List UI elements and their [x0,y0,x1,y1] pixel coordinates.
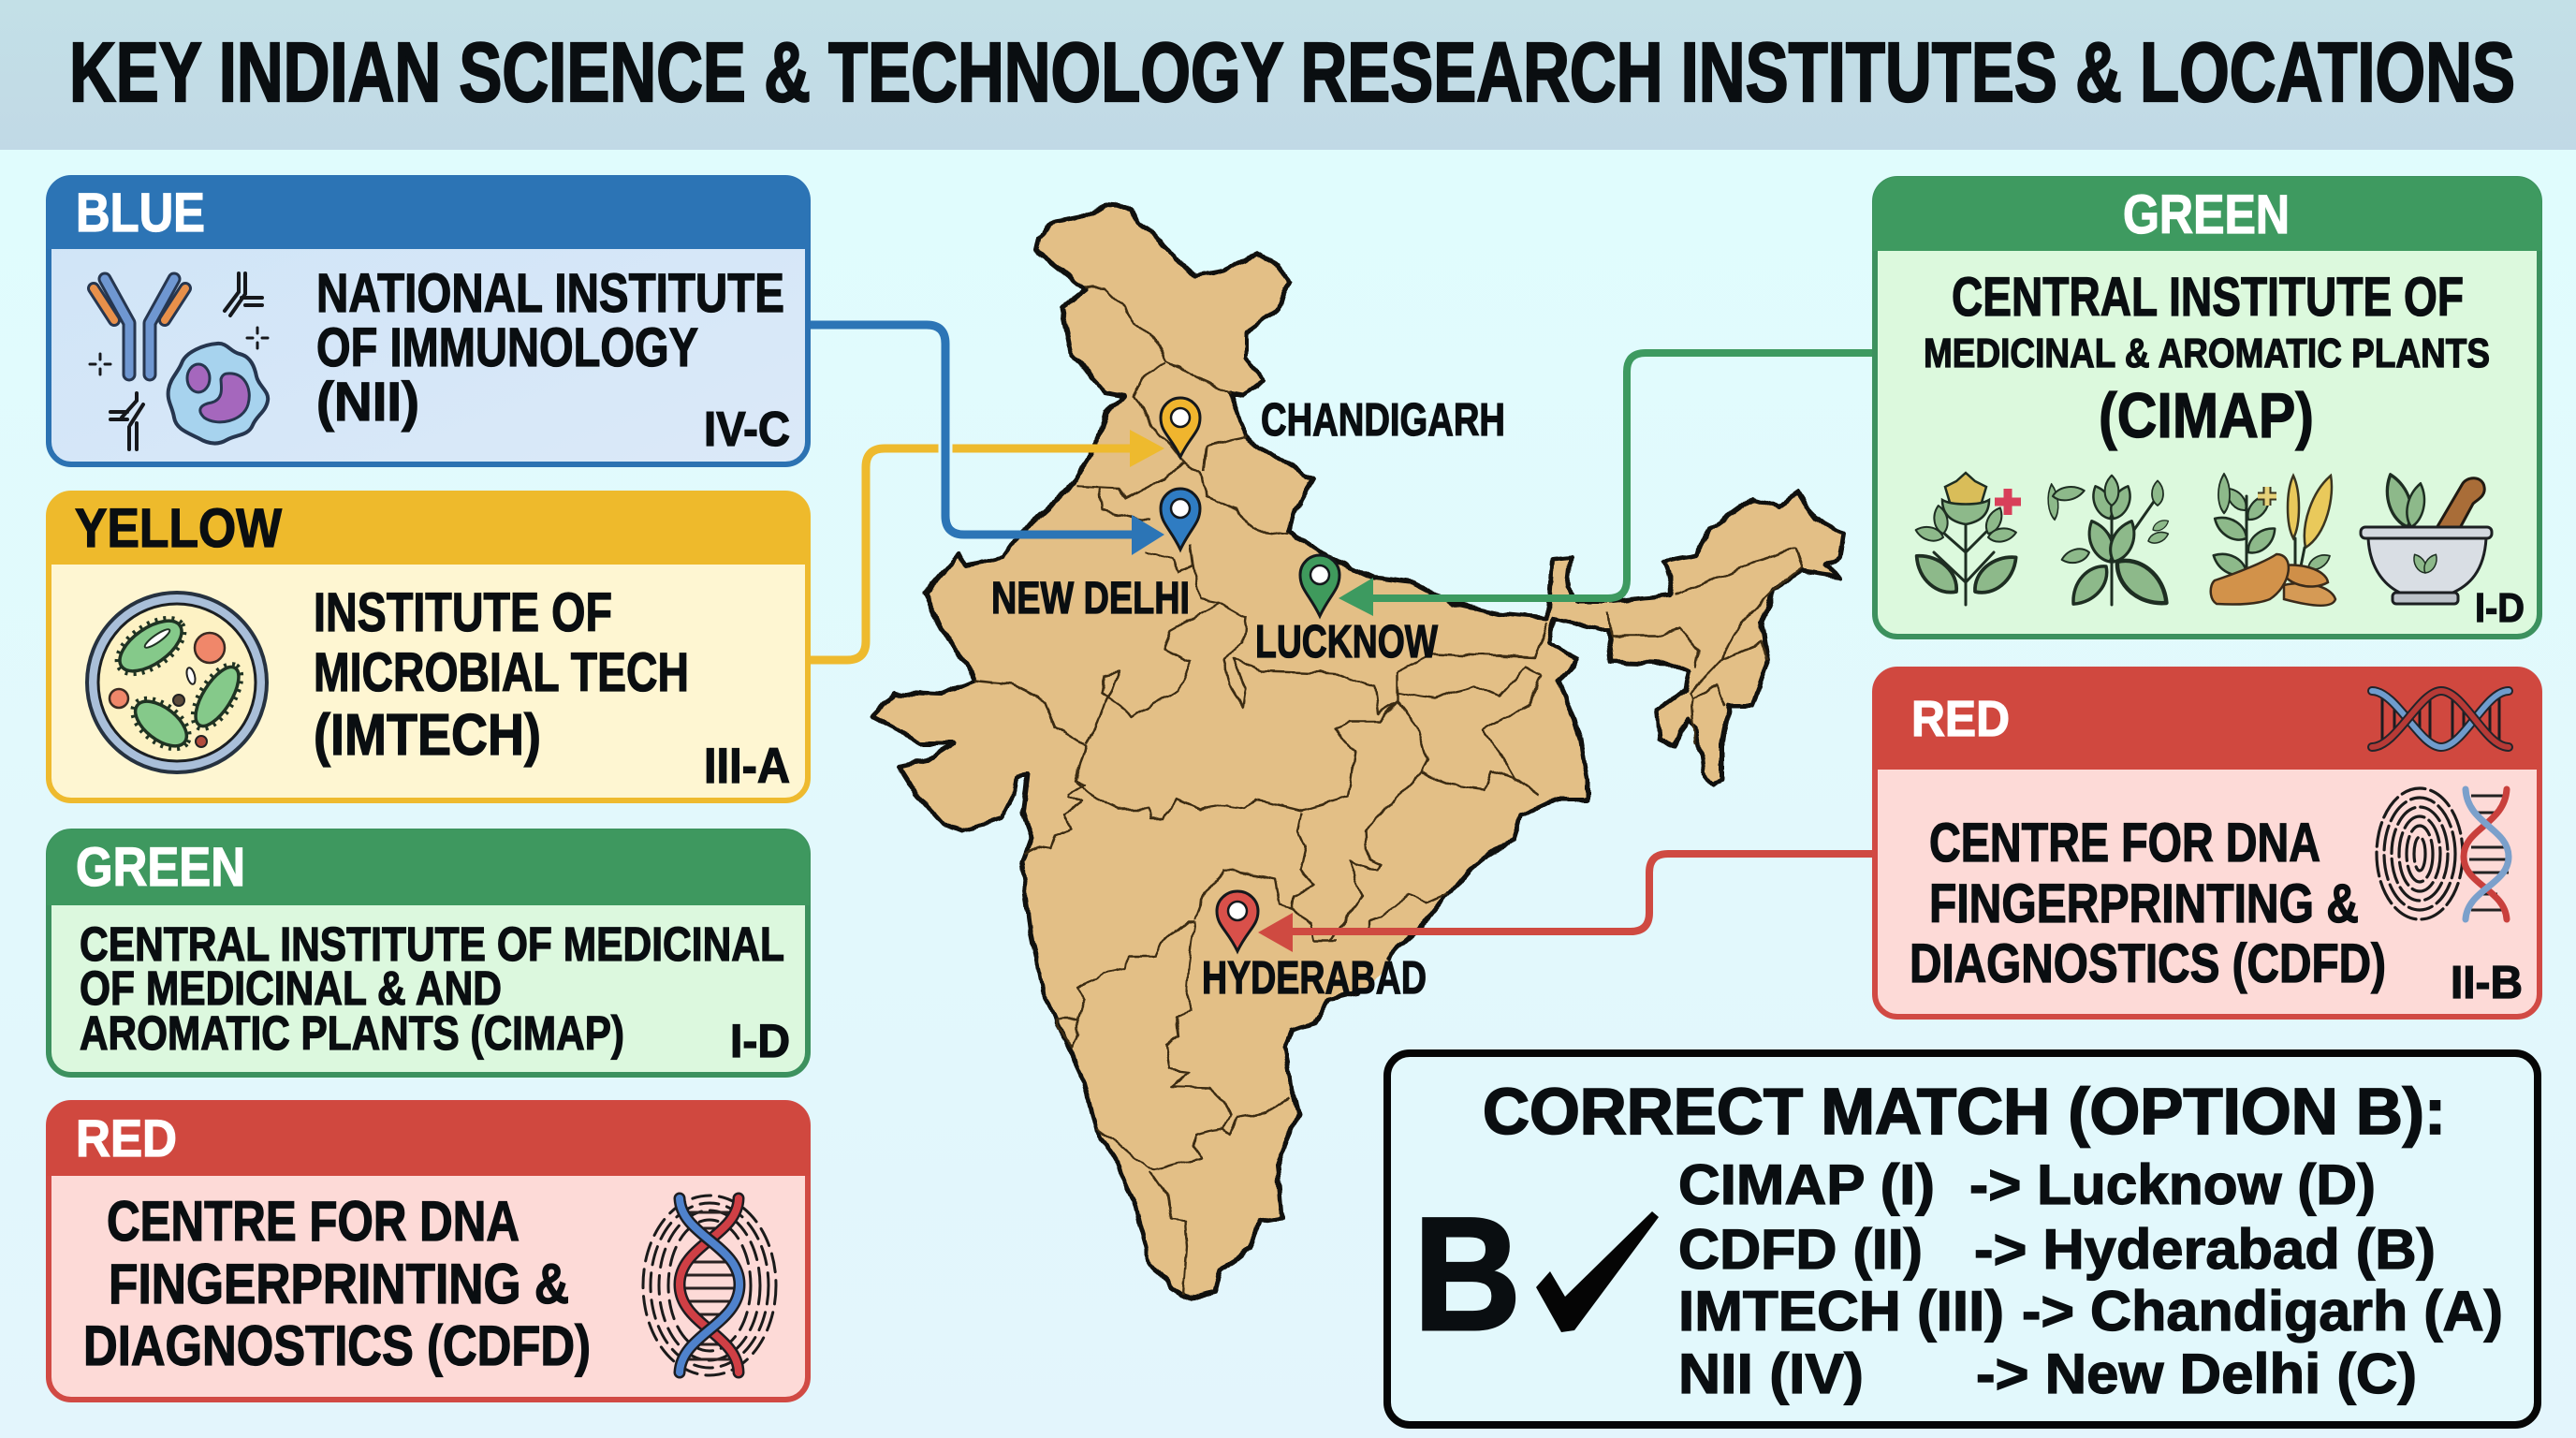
icon: antibody [94,279,185,374]
heading: YELLOW: YELLOW [75,498,282,559]
icon: fingerprint with DNA [2377,788,2509,919]
code: IV-C: IV-C [704,403,790,457]
icon: mortar and pestle [2361,472,2492,604]
icon: medicinal plant 1 [1909,473,2024,605]
institute name: NATIONAL INSTITUTE [316,263,784,324]
icon: petri dish [87,593,267,772]
institute name: DIAGNOSTICS (CDFD) [1910,933,2386,994]
institute name: FINGERPRINTING & [109,1253,569,1315]
institute name: OF MEDICINAL & AND [80,961,502,1015]
institute name: (NII) [316,372,419,433]
pin: New Delhi [1161,489,1200,550]
pin: Chandigarh [1161,398,1200,457]
institute name [314,582,689,768]
code: I-D: I-D [730,1015,790,1067]
heading: CORRECT MATCH (OPTION B): [1483,1075,2446,1148]
connector: green CIMAP to Lucknow [1339,353,1873,616]
panel: yellow IMTECH [47,492,810,800]
institute name: MICROBIAL TECH [314,642,689,703]
label: Lucknow: LUCKNOW [1255,617,1439,668]
answer letter B: B [1413,1184,1521,1364]
coast hidden behind Hyderabad label [1359,961,1387,990]
match rows: CDFD (II) [1678,1218,1923,1281]
institute name: OF IMMUNOLOGY [316,317,698,378]
pin: Lucknow [1300,555,1339,616]
code: III-A: III-A [704,739,790,794]
institute name: (IMTECH) [314,703,541,768]
panel: red CDFD left [47,1101,810,1400]
pin: Hyderabad [1217,891,1258,951]
connector: blue NII to New Delhi [810,325,1164,555]
institute name: (CIMAP) [2099,380,2314,451]
institute name [316,263,784,433]
institute name: CENTRAL INSTITUTE OF MEDICINAL [80,917,784,971]
panel: green CIMAP right [1873,177,2541,637]
heading: GREEN: GREEN [2123,184,2290,245]
institute name [1924,267,2490,451]
icon: medicinal plant 2 [2047,476,2175,614]
label: Chandigarh: CHANDIGARH [1261,395,1505,446]
code: II-B: II-B [2451,958,2523,1008]
icon: medicinal plant 3 [2210,474,2335,606]
match rows: -> Hyderabad (B) [1974,1218,2436,1281]
institute name: CENTRE FOR DNA [1929,813,2320,873]
label: Hyderabad: HYDERABAD [1202,953,1427,1004]
match rows: CIMAP (I) [1678,1153,1935,1216]
institute name: INSTITUTE OF [314,582,612,643]
institute name [83,1190,591,1377]
state borders [973,287,1801,1294]
panel: blue NII [47,176,810,464]
icon: small antibodies and sparkles [90,273,268,449]
institute name: DIAGNOSTICS (CDFD) [83,1314,591,1377]
institute name [80,917,784,1060]
match rows: NII (IV) [1678,1343,1864,1405]
map of India [872,206,1844,1299]
match rows: -> Chandigarh (A) [2022,1280,2503,1343]
label: New Delhi: NEW DELHI [991,574,1190,624]
icon: header DNA helix [2372,691,2509,747]
panel: green CIMAP left [47,829,810,1075]
heading: BLUE: BLUE [76,183,205,243]
match rows [1678,1153,2503,1405]
heading: RED: RED [76,1108,177,1167]
panel: red CDFD right [1873,668,2541,1017]
icon: immune cell [168,344,268,444]
connector: yellow IMTECH to Chandigarh [810,430,1164,660]
heading: GREEN: GREEN [76,837,245,898]
title band [0,0,2576,150]
match rows: IMTECH (III) [1678,1280,2004,1343]
code: I-D: I-D [2475,585,2525,631]
institute name: AROMATIC PLANTS (CIMAP) [80,1006,624,1060]
panel: correct match answer [1387,1053,2538,1425]
heading: RED: RED [1911,691,2010,747]
institute name [1910,813,2386,994]
institute name: FINGERPRINTING & [1929,873,2359,934]
icon: check mark [1536,1211,1659,1332]
match rows: -> Lucknow (D) [1969,1153,2376,1216]
icon: DNA fingerprint [643,1196,776,1375]
institute name: CENTRE FOR DNA [107,1190,520,1253]
connector: red CDFD to Hyderabad [1258,854,1873,952]
match rows: -> New Delhi (C) [1976,1343,2417,1405]
